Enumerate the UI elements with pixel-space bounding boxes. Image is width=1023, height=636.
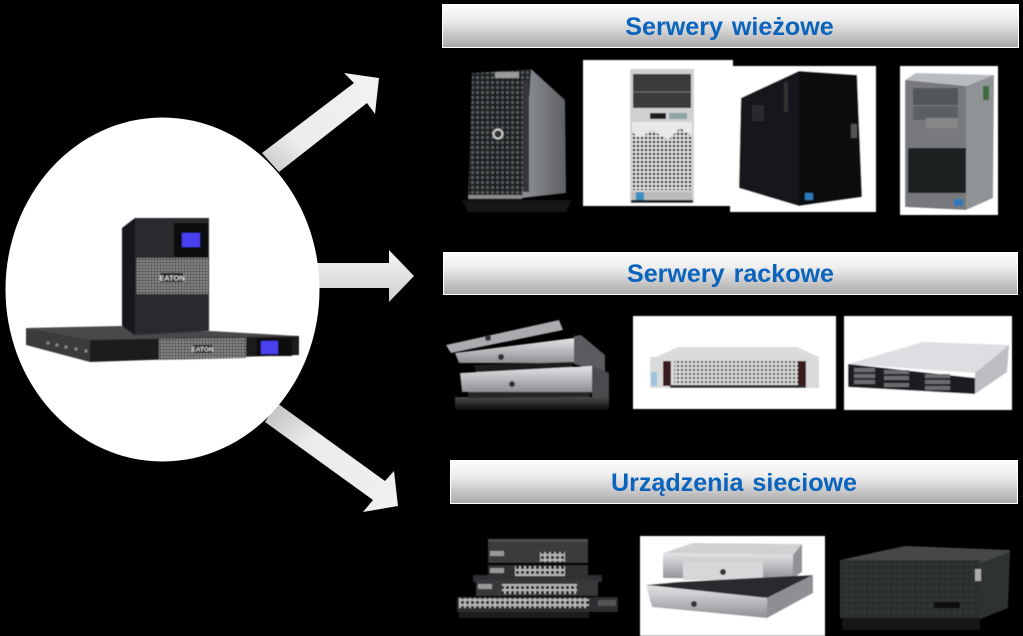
- image: HP tower server: [583, 60, 733, 206]
- heading: Serwery rackowe: Serwery rackowe: [627, 260, 834, 288]
- icon: rack UPS: EATON: [191, 346, 214, 354]
- arrow: up right: [262, 73, 379, 172]
- arrow: right: [317, 250, 414, 302]
- heading: Serwery wieżowe: Serwery wieżowe: [625, 13, 834, 41]
- image: Dell rack servers: [446, 320, 609, 410]
- heading: Urządzenia sieciowe: Urządzenia sieciowe: [611, 469, 857, 497]
- image: Dell tower server: [462, 69, 572, 212]
- arrow: down right: [265, 403, 398, 512]
- image: black storage enclosure: [840, 546, 1010, 630]
- icon: tower UPS: [122, 218, 209, 335]
- heading: Serwery wieżowe: [442, 4, 1018, 48]
- image: Fujitsu tower server: [900, 66, 998, 215]
- icon: tower UPS: EATON: [159, 274, 185, 282]
- image: network switches: [457, 539, 618, 618]
- panel: UPS circle: [6, 118, 320, 462]
- icon: rack UPS: [26, 326, 299, 362]
- image: Dell storage array: [640, 536, 825, 636]
- image: black tower server: [730, 66, 876, 212]
- heading: Serwery rackowe: [444, 252, 1018, 294]
- image: IBM rack server: [844, 316, 1012, 410]
- image: HP rack server: [633, 316, 836, 409]
- heading: Urządzenia sieciowe: [450, 460, 1018, 504]
